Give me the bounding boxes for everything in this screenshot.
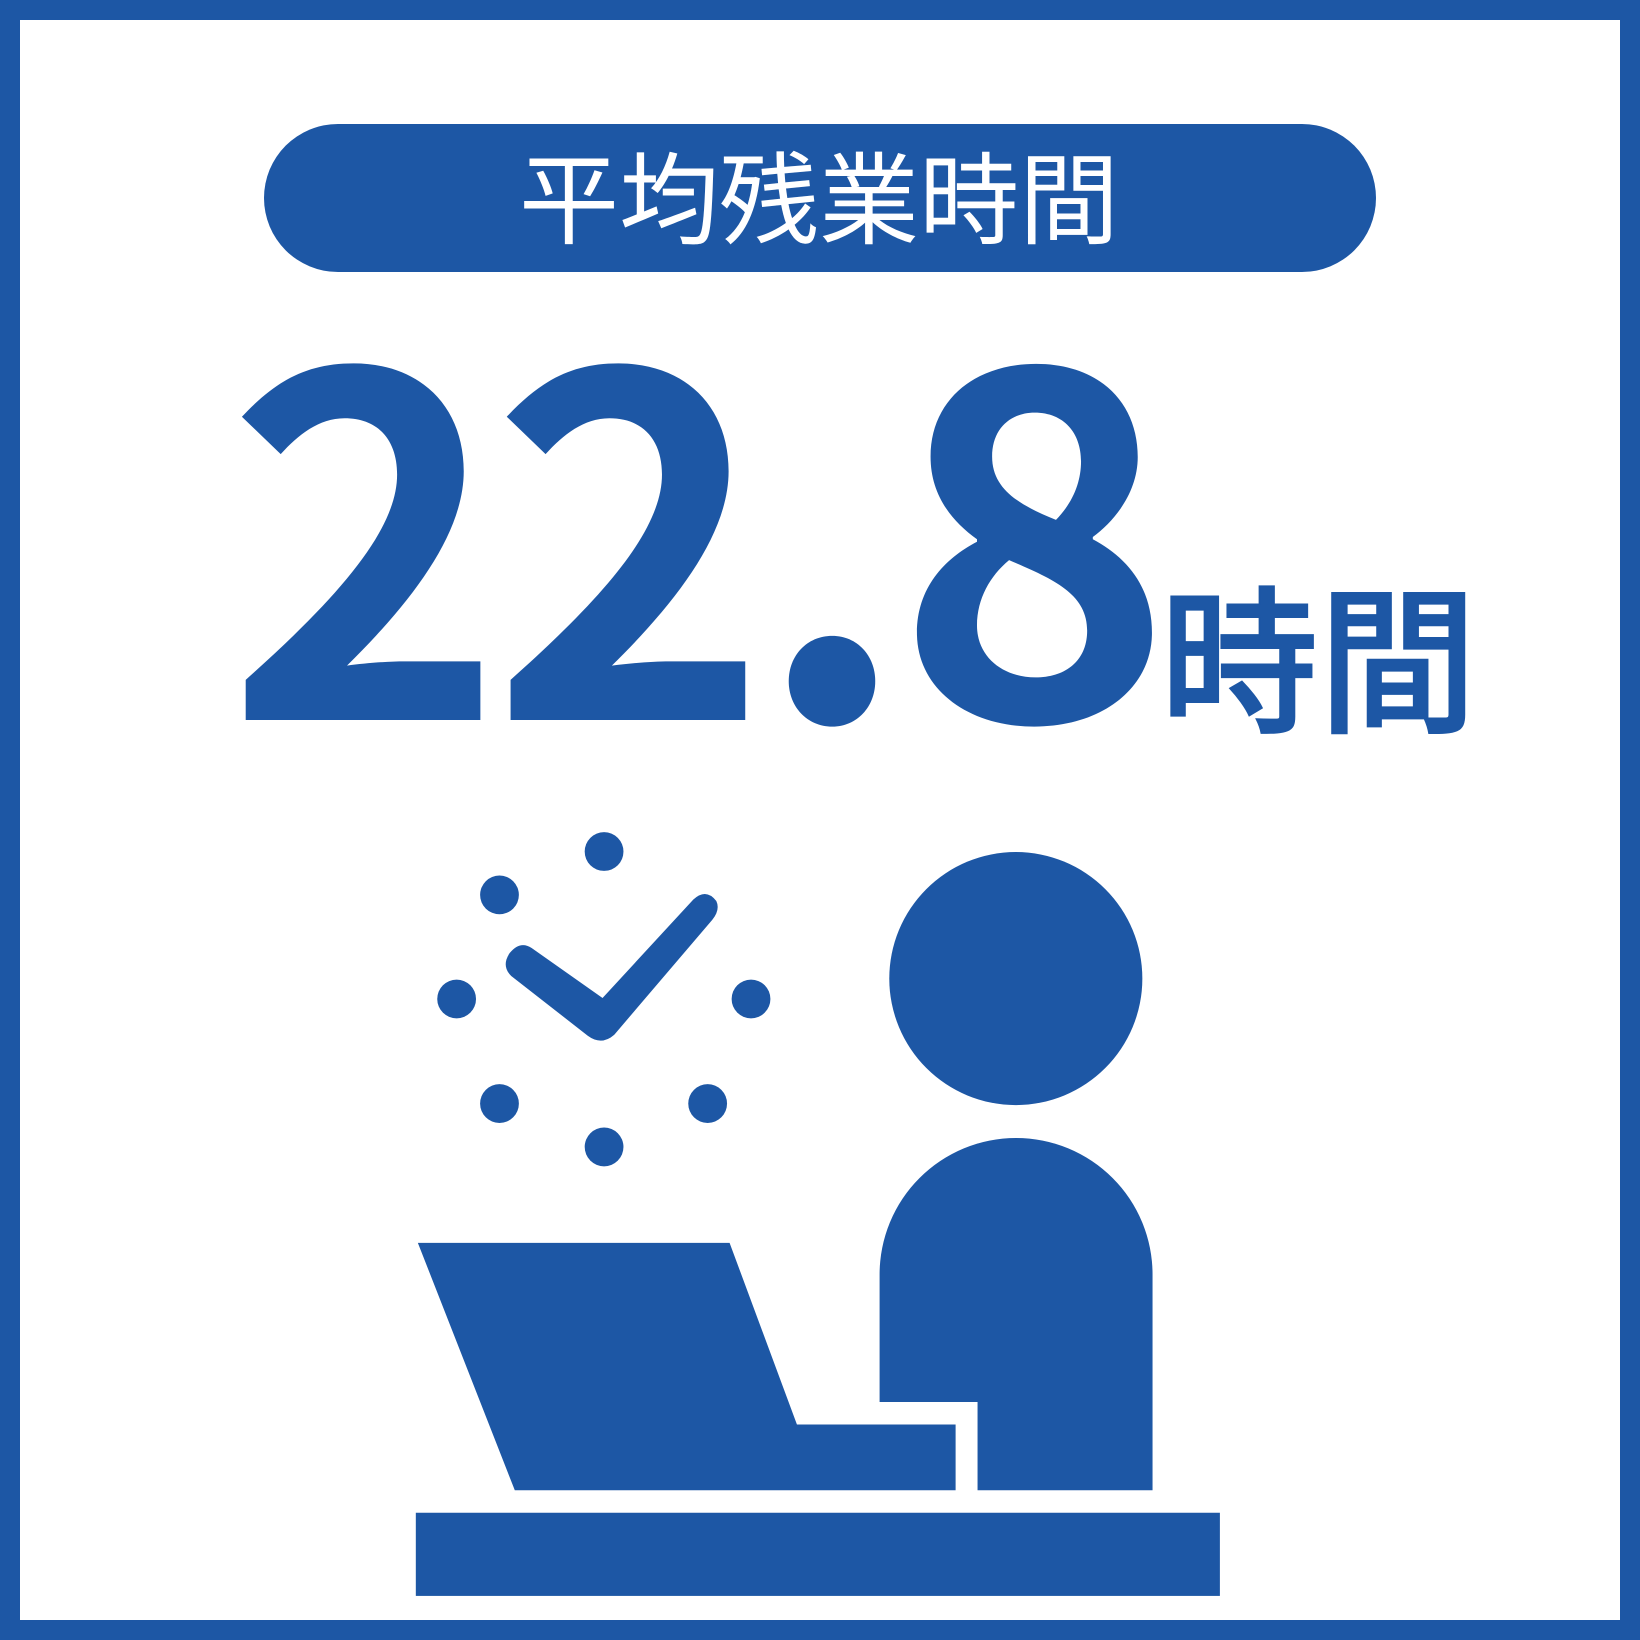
big number value: 22.8 bbox=[225, 172, 1160, 857]
icon: desk bbox=[416, 1513, 1220, 1596]
title pill bbox=[264, 120, 1376, 272]
icon: person body bbox=[880, 1138, 1153, 1490]
unit text: 時間 bbox=[1160, 536, 1477, 766]
icon: person head bbox=[889, 852, 1142, 1105]
icon: laptop bbox=[418, 1243, 956, 1490]
icon: clock dots bbox=[437, 832, 770, 1166]
icon: person at laptop with clock bbox=[416, 832, 1220, 1596]
icon: clock hands bbox=[506, 894, 718, 1041]
title text: 平均残業時間 bbox=[519, 120, 1119, 265]
